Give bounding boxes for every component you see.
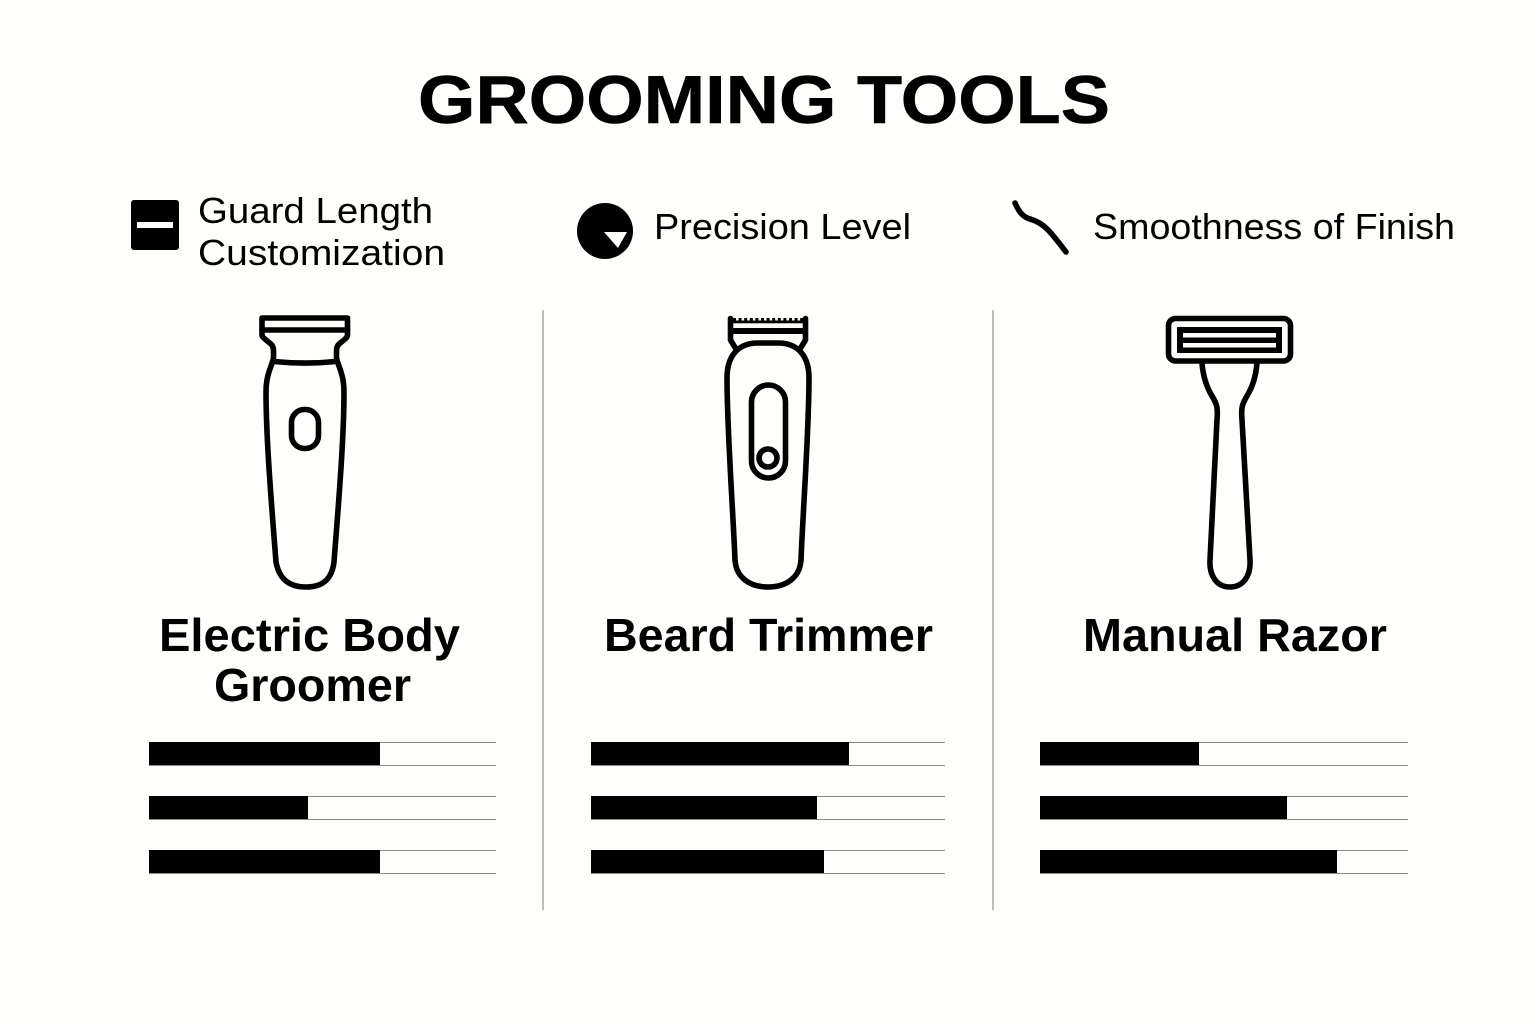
icon: electric body groomer <box>262 318 348 587</box>
legend label: guard length <box>198 190 445 273</box>
legend label: precision level: Precision Level <box>654 206 911 247</box>
tool name: electric body groomer <box>159 609 460 711</box>
title: GROOMING TOOLS <box>418 62 1110 138</box>
legend: smoothness of finish <box>1015 203 1455 252</box>
icon: smooth curve <box>1015 203 1066 252</box>
legend: guard length customization <box>131 190 445 273</box>
bar chart: electric body groomer <box>149 742 496 874</box>
tool name: electric body groomer: Electric Body <box>159 609 460 661</box>
icon: precision dial <box>577 203 633 259</box>
panel: beard trimmer <box>591 318 945 874</box>
legend label: smoothness of finish: Smoothness of Finish <box>1093 206 1455 247</box>
legend: precision level <box>577 203 911 259</box>
tool name: manual razor: Manual Razor <box>1083 609 1387 661</box>
panel: manual razor <box>1040 318 1408 874</box>
bar chart: manual razor <box>1040 742 1408 874</box>
legend label: guard length: Customization <box>198 232 445 273</box>
legend label: guard length: Guard Length <box>198 190 433 231</box>
icon: guard length square <box>131 200 179 250</box>
panel: electric body groomer <box>149 318 496 874</box>
bar chart: beard trimmer <box>591 742 945 874</box>
icon: manual razor <box>1168 318 1290 587</box>
tool name: beard trimmer: Beard Trimmer <box>604 609 933 661</box>
icon: beard trimmer <box>727 318 809 587</box>
tool name: electric body groomer: Groomer <box>214 659 411 711</box>
